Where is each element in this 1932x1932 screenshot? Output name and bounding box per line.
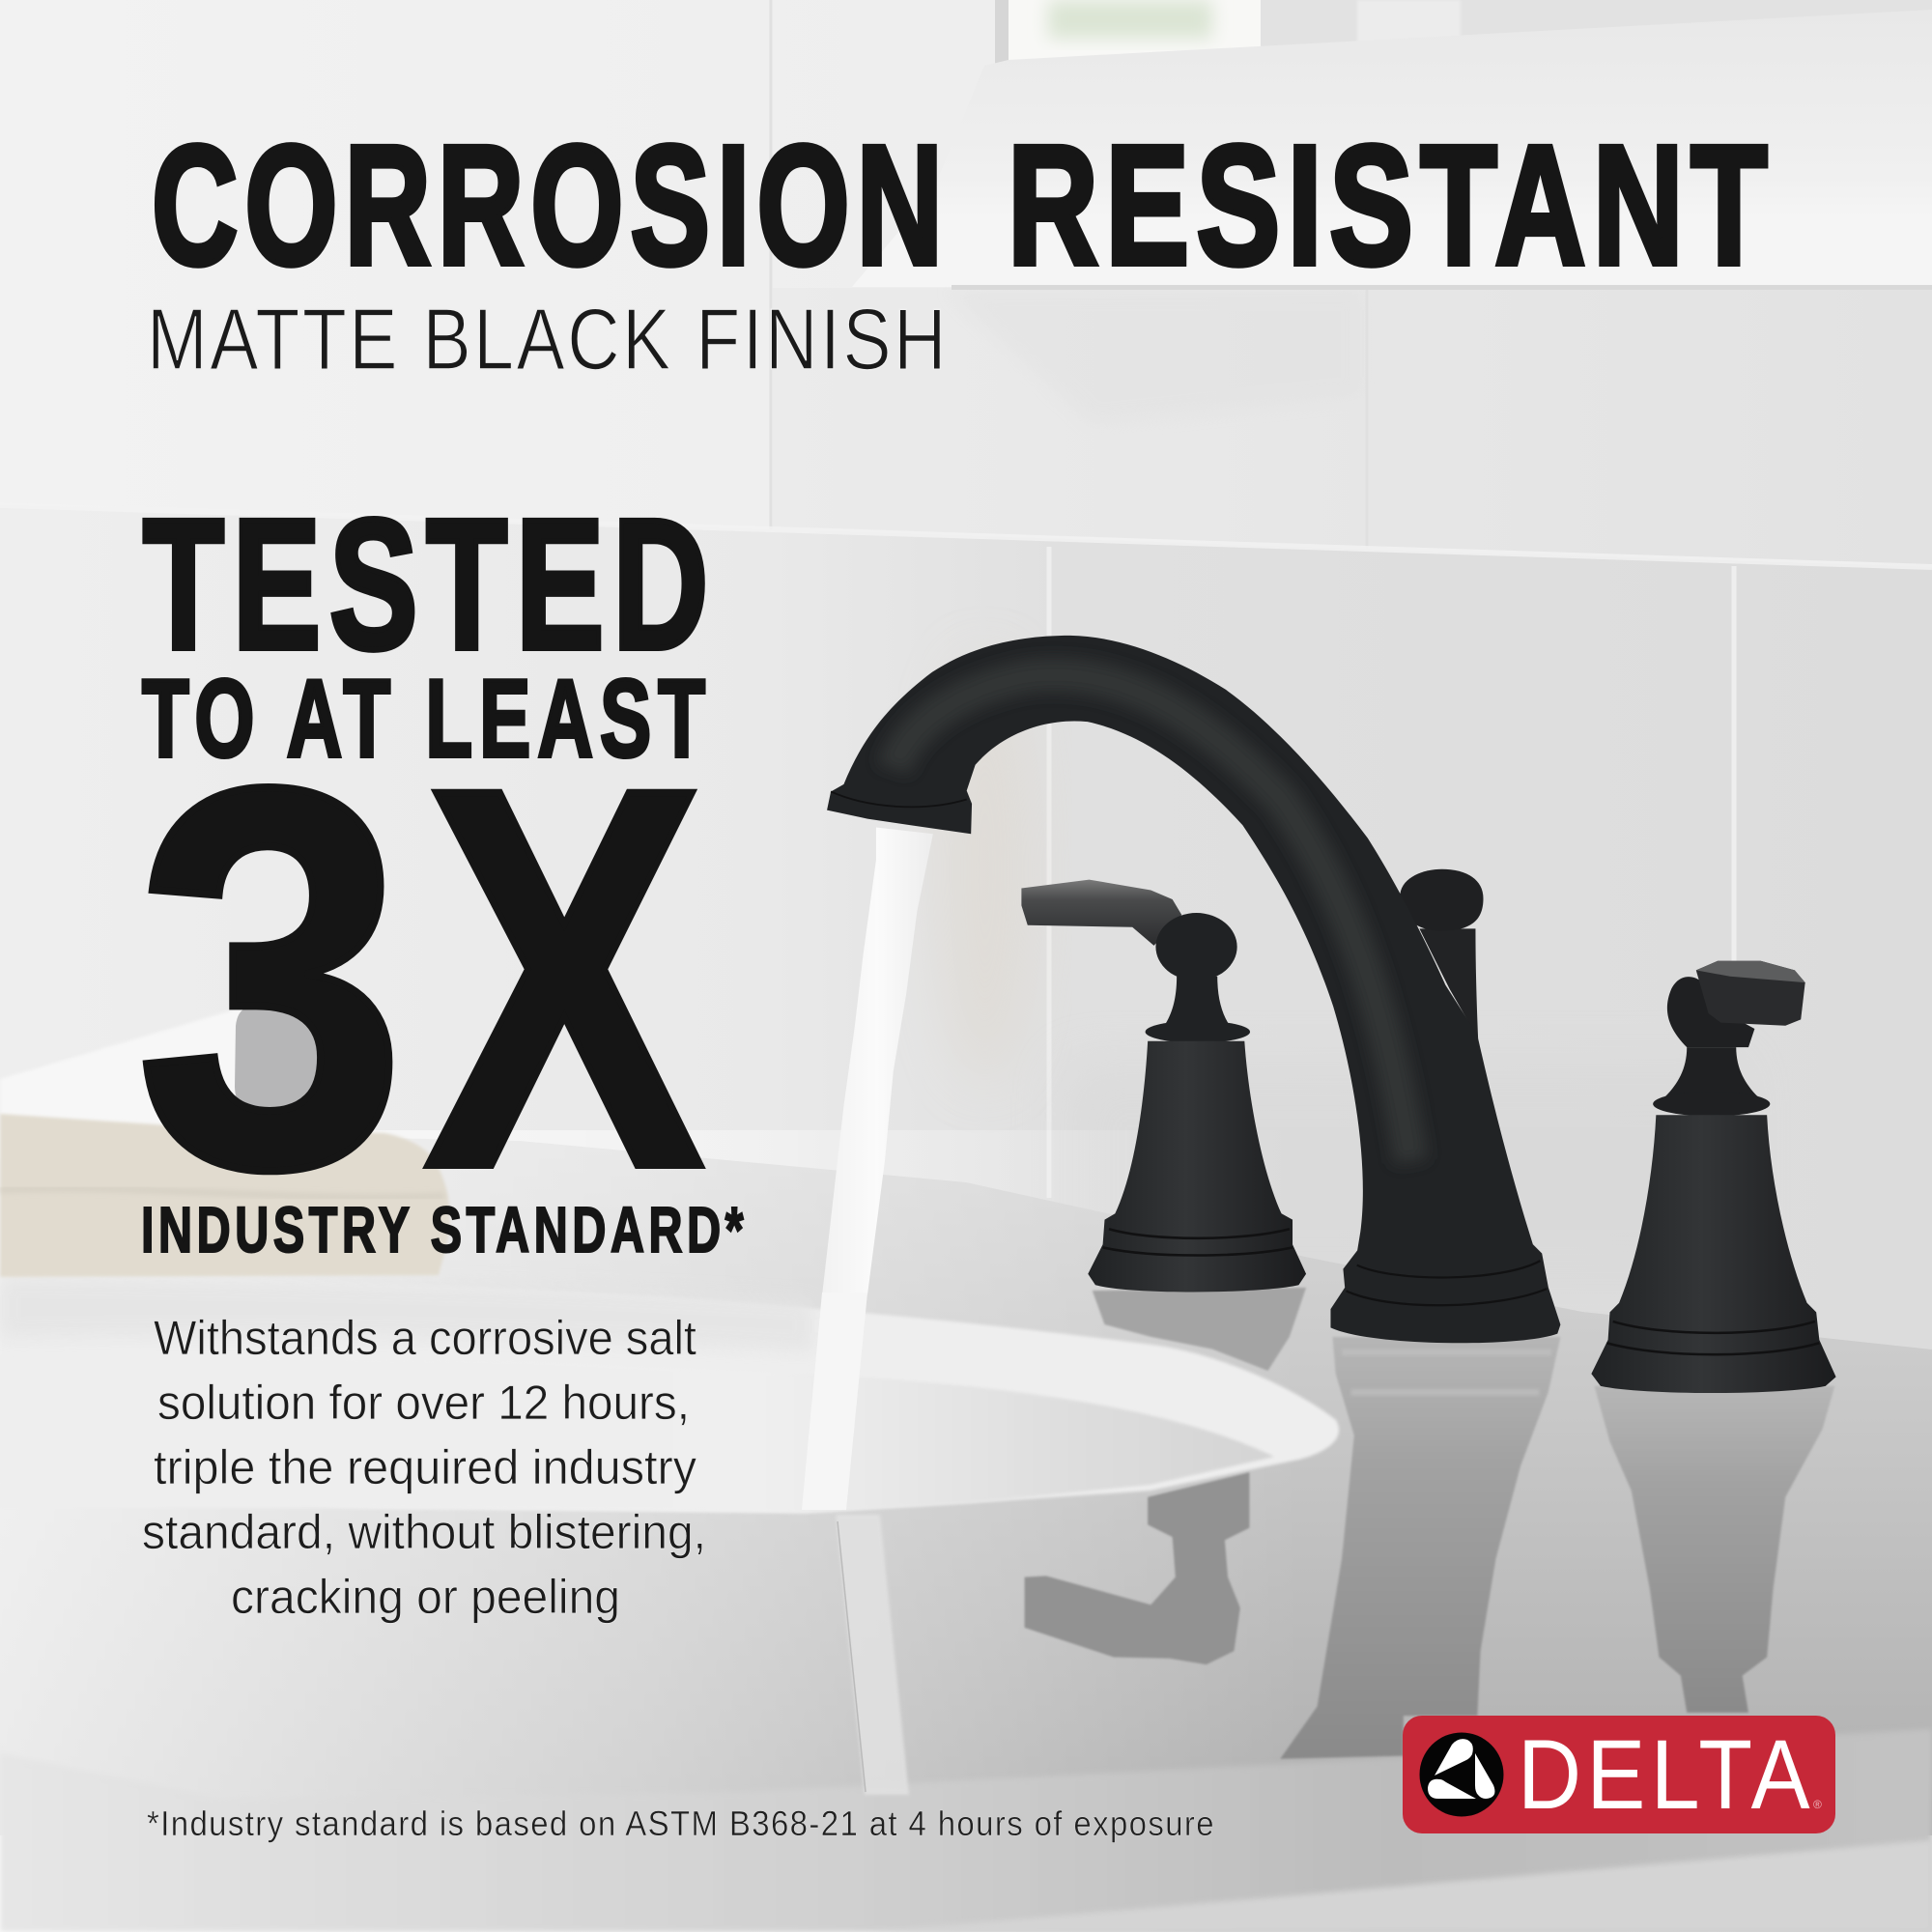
lower marble wall tiles	[0, 505, 1932, 1372]
description text: standard, without blistering,	[142, 1505, 706, 1559]
faucet reflections	[1025, 1288, 1834, 1759]
logo wordmark: DELTA	[1518, 1719, 1815, 1830]
reflected handle in basin	[1025, 1472, 1249, 1664]
knob and lift rod	[1400, 869, 1483, 1038]
towel	[0, 1114, 450, 1277]
counter bottom edge	[0, 1729, 1932, 1932]
description text: cracking or peeling	[231, 1570, 620, 1624]
claim: tested to at least 3x industry standard	[135, 480, 748, 1280]
footnote: *Industry standard is based on ASTM B368-21 at 4 hours of exposure	[147, 1804, 1215, 1843]
description text: solution for over 12 hours,	[157, 1376, 690, 1430]
logo mark	[1420, 1733, 1503, 1816]
description text	[142, 1311, 706, 1624]
left handle reflection	[1093, 1288, 1306, 1371]
window at top	[995, 0, 1932, 68]
left handle	[1021, 880, 1306, 1292]
countertop	[0, 1130, 1932, 1835]
right handle	[1591, 961, 1836, 1393]
3x: X	[424, 675, 706, 1280]
water stream	[802, 828, 933, 1795]
spout and base	[827, 636, 1560, 1343]
description text: triple the required industry	[154, 1440, 696, 1494]
sink rim	[0, 1277, 1339, 1513]
sink basin	[0, 1355, 1274, 1513]
right handle reflection	[1595, 1386, 1834, 1713]
upper wall tiles	[773, 288, 1932, 567]
tested: TESTED	[143, 480, 717, 688]
spout reflection	[1280, 1337, 1560, 1759]
soap dish	[0, 1007, 333, 1159]
subtitle: MATTE BLACK FINISH	[147, 292, 949, 388]
logo: Delta	[1403, 1716, 1835, 1833]
title: CORROSION	[152, 111, 950, 300]
window sill and shelf	[852, 10, 1932, 287]
faucet	[827, 636, 1836, 1393]
to at least: TO AT LEAST	[142, 658, 712, 781]
registered mark: ®	[1813, 1798, 1822, 1811]
3x: 3	[135, 675, 407, 1280]
industry standard: INDUSTRY STANDARD*	[141, 1194, 748, 1266]
description text: Withstands a corrosive salt	[154, 1311, 696, 1365]
